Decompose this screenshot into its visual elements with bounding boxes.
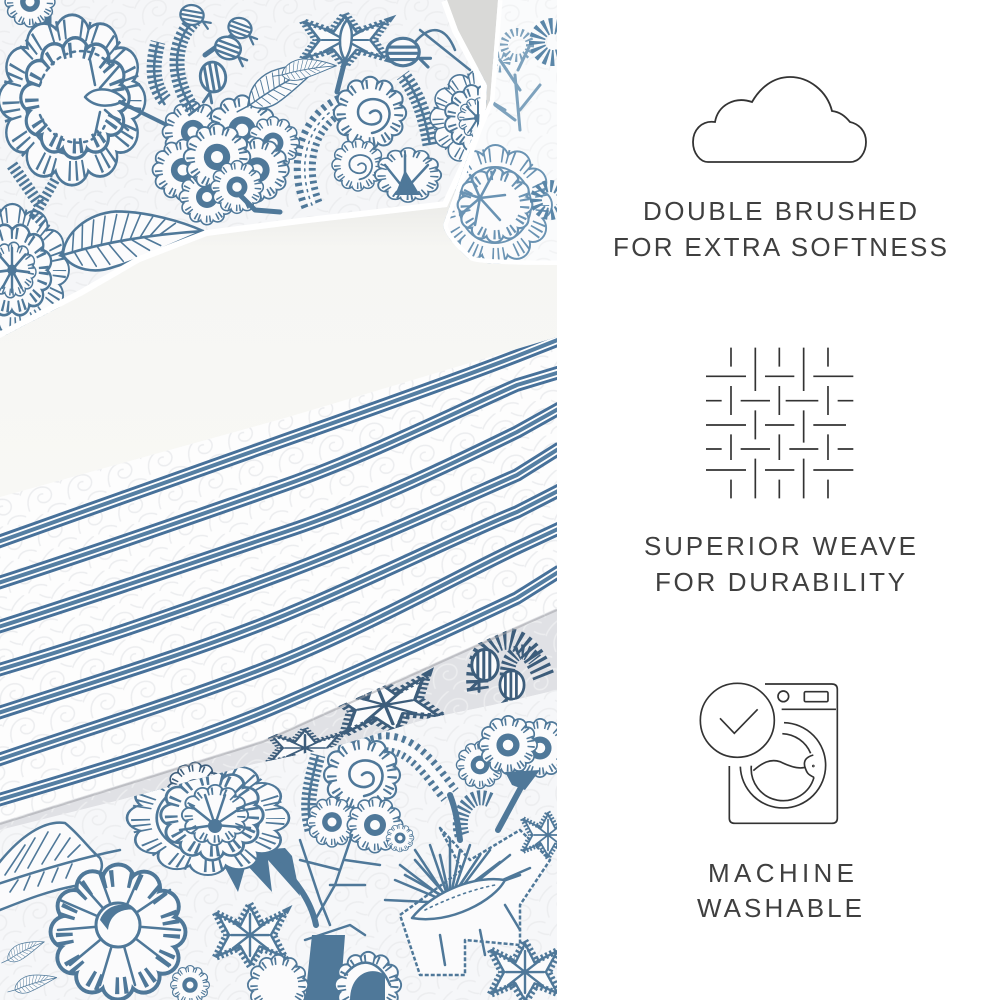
stripe band	[0, 337, 560, 824]
big jacobean flower	[11, 29, 177, 171]
fern	[154, 42, 165, 105]
sprig	[12, 165, 55, 225]
small sprigs	[0, 934, 205, 1000]
feature: weave	[644, 348, 916, 597]
white sheet	[335, 0, 498, 220]
left pillow trim	[0, 0, 487, 338]
paisley bottom	[254, 925, 394, 1000]
right pillow trim	[443, 0, 557, 265]
photo: bedding collage	[0, 0, 574, 1000]
icon: cloud	[693, 77, 866, 162]
star bottom right	[490, 941, 560, 1000]
star leaf	[215, 904, 285, 966]
small flower sprig	[280, 802, 411, 925]
floral pillow right	[443, 0, 557, 264]
heading: machine: MACHINE	[708, 858, 854, 888]
right peony	[429, 69, 487, 162]
feature: softness	[613, 77, 947, 262]
floral pillow left	[0, 0, 518, 340]
right fern	[403, 75, 430, 145]
feature: washable	[697, 683, 862, 923]
heading: for extra softness: FOR EXTRA SOFTNESS	[613, 232, 947, 262]
lower floral quilt	[0, 680, 574, 1000]
large feather leaf	[62, 210, 204, 272]
left peony	[0, 215, 60, 325]
bud top right	[387, 30, 470, 70]
peony top	[140, 770, 300, 896]
fan cluster right	[461, 722, 574, 858]
heading: double brushed: DOUBLE BRUSHED	[643, 196, 917, 226]
heading: washable: WASHABLE	[697, 893, 862, 923]
lower quilt under layer	[0, 600, 557, 840]
toothed vine spiral	[305, 84, 399, 205]
small spiral	[337, 144, 379, 186]
fern	[309, 755, 318, 835]
feather flower	[385, 828, 550, 975]
heading: superior weave: SUPERIOR WEAVE	[644, 531, 916, 561]
bottom flower	[382, 153, 434, 197]
spiral vine	[332, 743, 490, 840]
icon: washing machine with check	[700, 683, 837, 823]
fan flower	[159, 102, 294, 219]
icon: weave	[706, 348, 853, 498]
stem top	[45, 16, 52, 24]
feather leaf bottom left	[0, 823, 120, 912]
heading: for durability: FOR DURABILITY	[655, 567, 905, 597]
small feather	[236, 66, 309, 113]
buds and thorn vine	[177, 3, 262, 112]
star flower	[302, 14, 388, 92]
open flower	[58, 875, 180, 986]
